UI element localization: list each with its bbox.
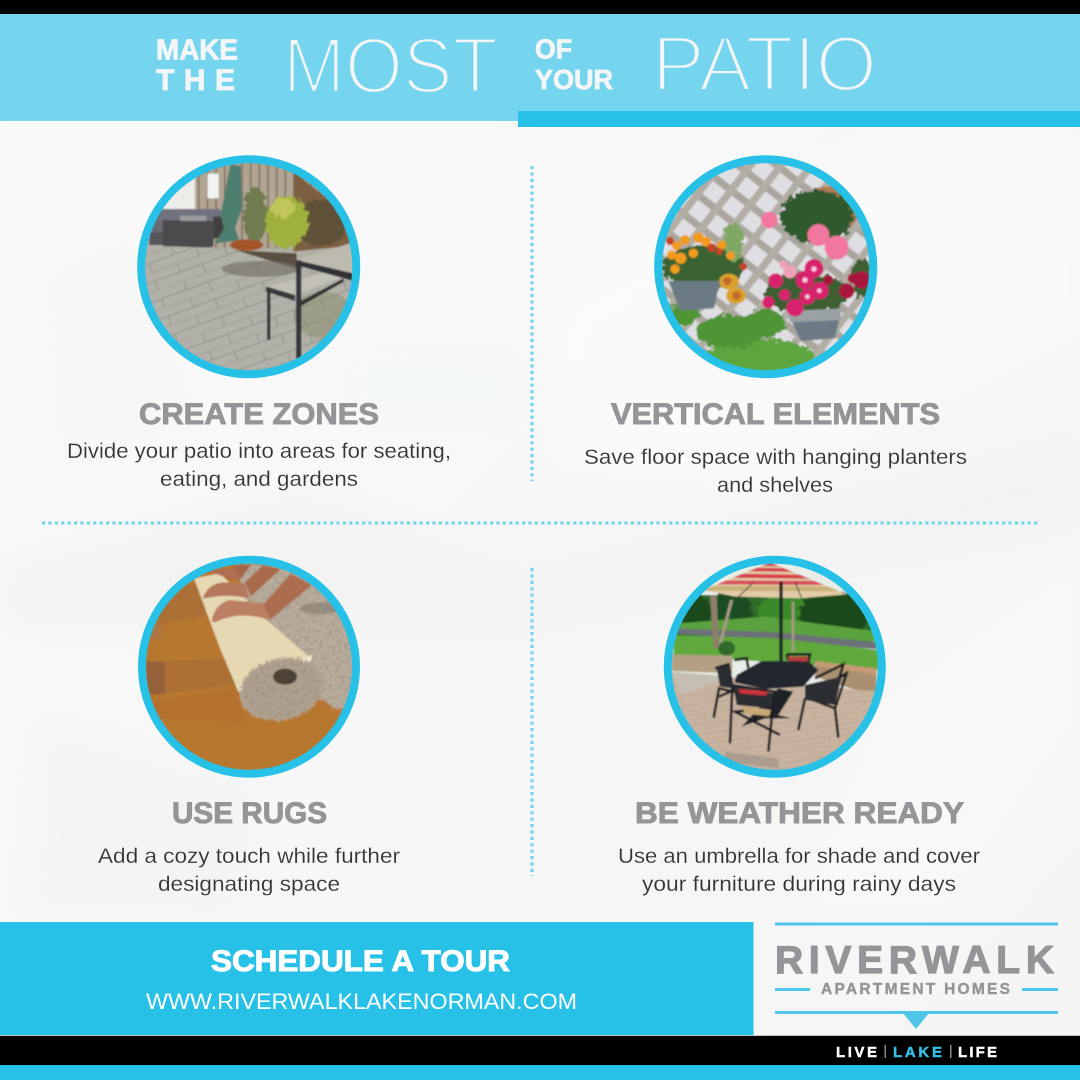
dotted dividers — [42, 166, 1038, 876]
heading: be weather ready: BE WEATHER READY — [635, 797, 964, 830]
title: patio: PATIO — [652, 20, 877, 108]
heading: use rugs: USE RUGS — [172, 797, 327, 830]
title: of your — [535, 34, 613, 95]
text: vertical elements: Save floor space with hanging planters — [584, 446, 967, 469]
photo: hanging planters — [653, 155, 887, 382]
ring — [658, 159, 873, 374]
tagline: LIVE — [836, 1044, 877, 1061]
photo: patio zones — [133, 155, 367, 382]
ring — [668, 560, 882, 774]
text: create zones: Divide your patio into areas for seating, — [67, 440, 451, 463]
title: most: MOST — [283, 20, 498, 110]
title: of your: OF — [535, 34, 572, 64]
title: of your: YOUR — [535, 64, 613, 95]
website url: WWW.RIVERWALKLAKENORMAN.COM — [146, 989, 577, 1014]
riverwalk logo — [775, 922, 1058, 1029]
text: be weather ready: your furniture during rainy days — [642, 873, 956, 896]
tagline: LAKE — [893, 1044, 942, 1061]
text: vertical elements: and shelves — [717, 474, 833, 497]
riverwalk logo: RIVERWALK — [775, 939, 1054, 982]
text: use rugs: designating space — [158, 873, 340, 896]
text: be weather ready — [618, 845, 980, 896]
photo: patio umbrella — [658, 555, 892, 782]
title: make the: THE — [156, 64, 235, 97]
call to action heading: SCHEDULE A TOUR — [211, 945, 510, 978]
title: make the — [156, 34, 238, 97]
text: create zones — [67, 440, 451, 491]
heading: vertical elements: VERTICAL ELEMENTS — [611, 398, 940, 431]
text: be weather ready: Use an umbrella for shade and cover — [618, 845, 980, 868]
title: make the: MAKE — [156, 34, 238, 66]
call to action band — [0, 922, 754, 1035]
text: use rugs: Add a cozy touch while further — [98, 845, 400, 868]
riverwalk logo: APARTMENT HOMES — [821, 981, 1010, 998]
photo: rug — [133, 555, 373, 782]
text: create zones: eating, and gardens — [160, 468, 358, 491]
header band — [0, 14, 1080, 127]
ring — [142, 560, 356, 774]
top black bar — [0, 0, 1080, 14]
text: vertical elements — [584, 446, 967, 497]
tagline: LIFE — [958, 1044, 997, 1061]
bottom black bar — [0, 1035, 1080, 1080]
ring — [141, 159, 356, 374]
text: use rugs — [98, 845, 400, 896]
heading: create zones: CREATE ZONES — [139, 398, 379, 431]
tagline — [836, 1044, 997, 1061]
